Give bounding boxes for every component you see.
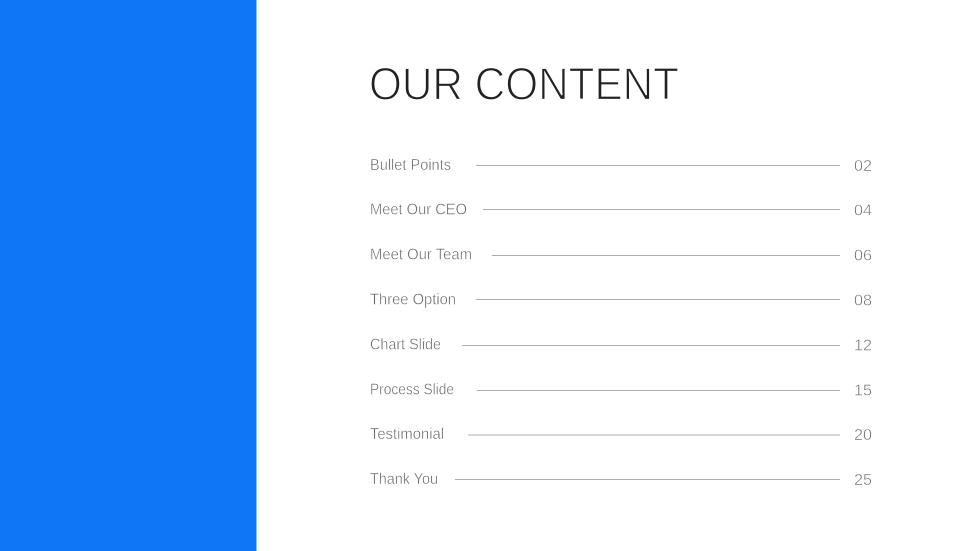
entry: Chart Slide <box>370 336 872 354</box>
entry: Thank You: Thank You <box>370 471 438 488</box>
title: OUR CONTENT <box>369 58 679 110</box>
entry: Three Option: Three Option <box>370 292 456 308</box>
entry: Thank You: 25 <box>854 472 872 489</box>
entry: Bullet Points: Bullet Points <box>370 157 451 174</box>
entry: Meet Our Team <box>370 246 872 264</box>
entry: Meet Our CEO <box>370 202 872 220</box>
entry: Meet Our Team: 06 <box>854 248 872 264</box>
entry: Process Slide: 15 <box>854 382 872 400</box>
entry: Meet Our Team: Meet Our Team <box>370 246 472 264</box>
entry: Bullet Points: 02 <box>854 158 872 175</box>
entry: Testimonial: Testimonial <box>370 426 444 443</box>
entry: Testimonial: 20 <box>854 427 872 444</box>
entry: Three Option <box>370 292 872 310</box>
entry: Process Slide: Process Slide <box>370 382 454 398</box>
list of contents <box>370 157 872 489</box>
panel: blue sidebar <box>0 0 256 551</box>
entry: Chart Slide: 12 <box>854 338 872 354</box>
entry: Testimonial <box>370 426 872 444</box>
entry: Thank You <box>370 471 872 489</box>
entry: Chart Slide: Chart Slide <box>370 336 441 354</box>
entry: Meet Our CEO: 04 <box>854 202 872 220</box>
entry: Three Option: 08 <box>854 292 872 310</box>
entry: Bullet Points <box>370 157 872 175</box>
entry: Process Slide <box>370 382 872 400</box>
entry: Meet Our CEO: Meet Our CEO <box>370 202 467 218</box>
